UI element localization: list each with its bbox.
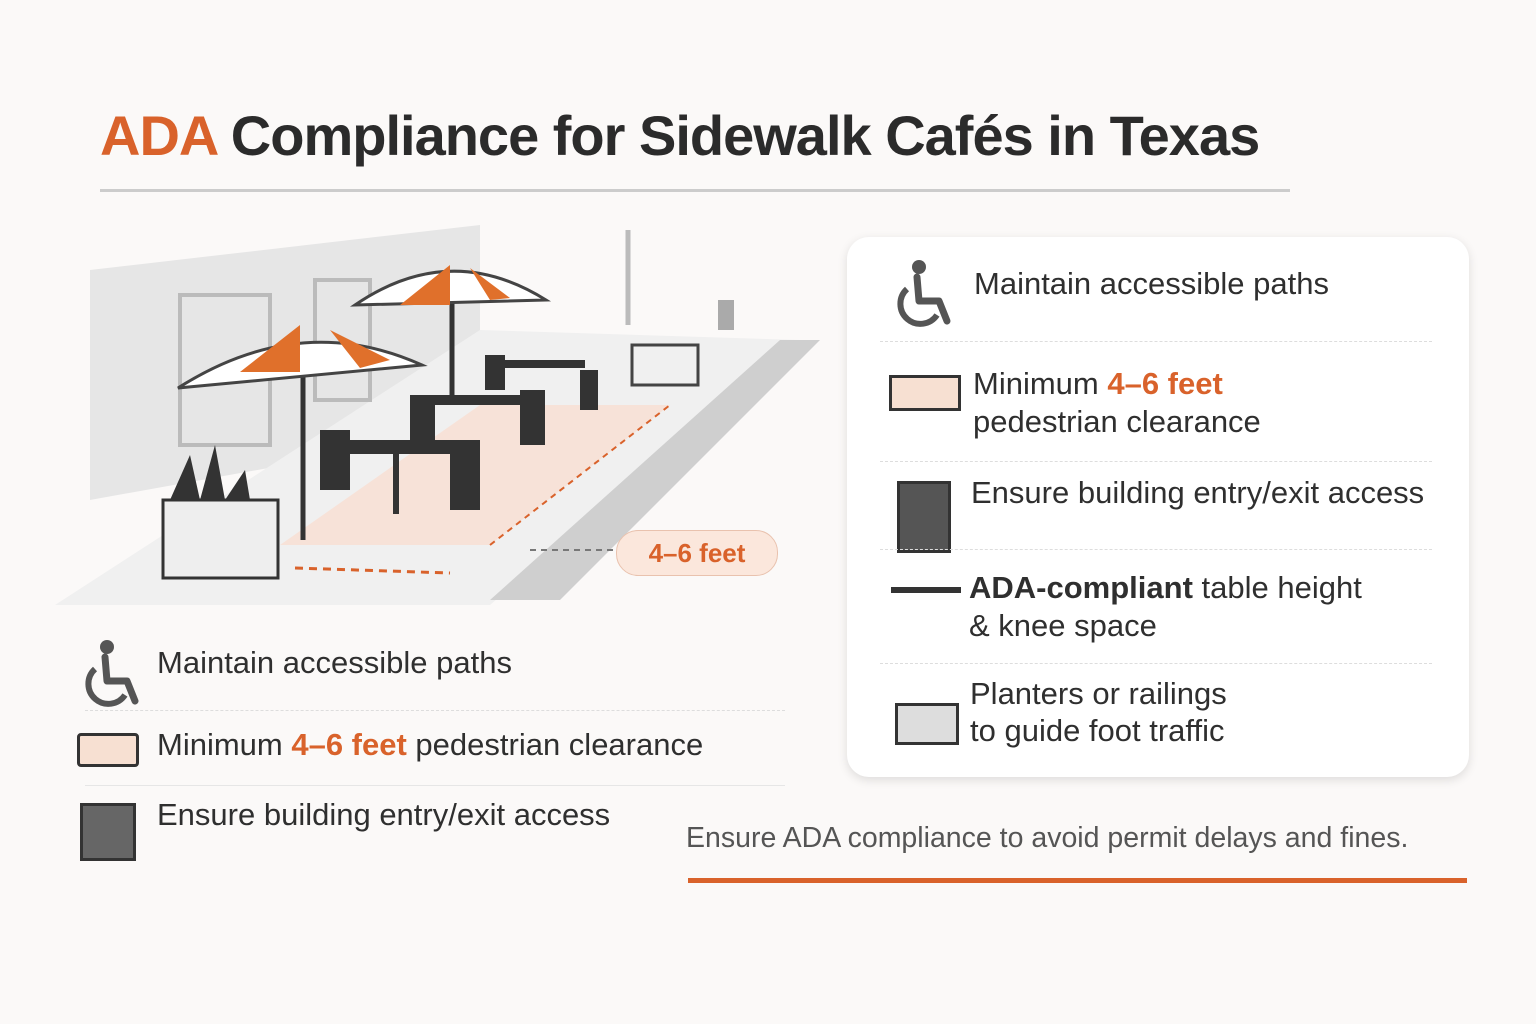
text: clearance: pedestrian clearance	[973, 404, 1261, 439]
icon: table	[891, 587, 961, 633]
illustration: sidewalk cafe	[56, 225, 820, 605]
text: planters: Planters or railings	[970, 676, 1227, 711]
icon: tape	[77, 733, 139, 767]
text: entry: Ensure building entry/exit access	[971, 475, 1424, 510]
text: table height: ADA-compliant table height	[969, 570, 1362, 605]
text: table height	[969, 570, 1362, 643]
footer note: Ensure ADA compliance to avoid permit delays and fines.	[686, 822, 1408, 854]
title: ADA Compliance for Sidewalk Cafés in Texas	[100, 104, 1259, 167]
text: clearance: Minimum 4–6 feet pedestrian clearance	[157, 727, 703, 762]
text: clearance: Minimum 4–6 feet	[973, 366, 1223, 401]
text: planters: to guide foot traffic	[970, 713, 1224, 748]
callout: 4-6 feet: 4–6 feet	[649, 538, 745, 568]
icon: wheelchair	[85, 640, 138, 707]
text: entry: Ensure building entry/exit access	[157, 797, 610, 832]
panel: right checklist	[847, 237, 1469, 777]
icon: door	[80, 803, 136, 861]
left checklist	[77, 640, 785, 861]
text: table height: & knee space	[969, 608, 1157, 643]
icon: measuring tape	[889, 375, 961, 411]
callout: 4-6 feet	[616, 530, 778, 576]
icon: wheelchair	[897, 260, 950, 327]
icon: planter	[895, 703, 959, 745]
text: accessible paths: Maintain accessible paths	[974, 266, 1329, 301]
text: planters	[970, 676, 1227, 748]
icon: door	[897, 481, 951, 553]
text: clearance	[973, 366, 1261, 439]
text: accessible paths: Maintain accessible paths	[157, 645, 512, 680]
